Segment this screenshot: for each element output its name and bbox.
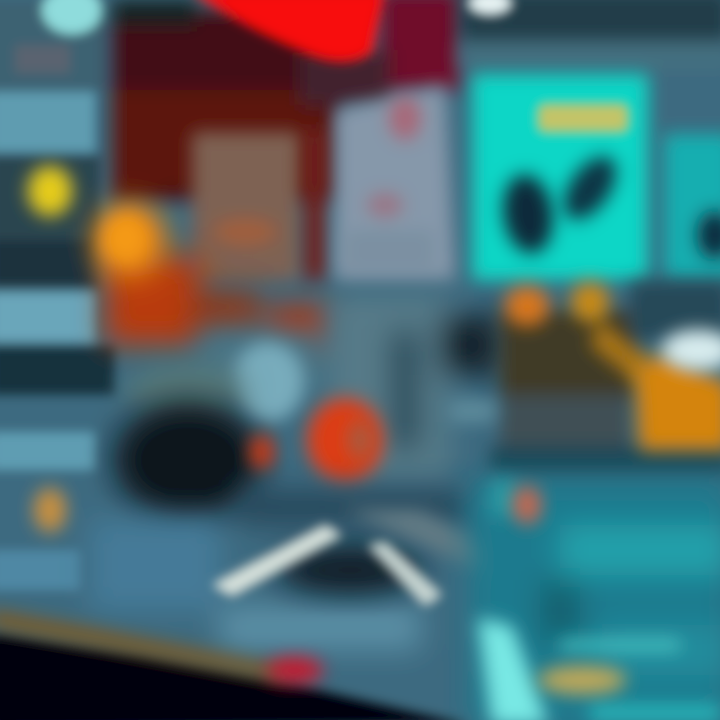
red orange ball (307, 398, 383, 482)
lower blue floor (90, 490, 470, 650)
yellow floor label (538, 666, 626, 694)
yellow screen label (538, 104, 628, 132)
white diagonal bar (212, 525, 342, 596)
panel red marks (345, 96, 435, 270)
red neon sign (190, 0, 385, 62)
cyan screen (472, 74, 648, 280)
poster detail (213, 218, 277, 246)
left column of shelves (0, 0, 115, 590)
reflection streaks (450, 400, 720, 720)
orange round lights (505, 282, 650, 385)
right screen dark shape (697, 211, 720, 259)
yellow light (28, 166, 72, 216)
dark sphere (114, 402, 262, 518)
white cup (662, 330, 720, 370)
grey white panel (335, 85, 455, 280)
orange box (635, 355, 720, 450)
ball highlight (348, 420, 372, 460)
cyan glare (478, 618, 548, 720)
lamp core (103, 214, 147, 262)
black foreground table (0, 632, 470, 720)
red orange reflection (513, 486, 541, 524)
right cyan screen (664, 134, 720, 280)
orange glowing lamp (94, 202, 166, 278)
orange red lower wall (105, 255, 330, 350)
beige poster (192, 132, 300, 280)
small red spot (250, 434, 274, 470)
grey dome (125, 364, 245, 420)
dark red backdrop (112, 0, 460, 200)
top right dark band (460, 0, 720, 70)
counter dark region (490, 280, 720, 475)
white short bar (368, 542, 442, 606)
mid grey floor area (200, 295, 500, 480)
red wall strip (304, 130, 326, 280)
top white highlight (468, 0, 512, 15)
brown table edge (0, 610, 290, 680)
dark shadow under cross (278, 546, 422, 594)
screen dark shape left (498, 171, 558, 257)
bottom right cyan floor (470, 480, 720, 720)
screen dark shape right (553, 147, 627, 229)
grey long bar (345, 510, 535, 588)
amber light low left (34, 488, 66, 532)
light teal blob (232, 342, 304, 422)
red object on table (267, 656, 323, 684)
